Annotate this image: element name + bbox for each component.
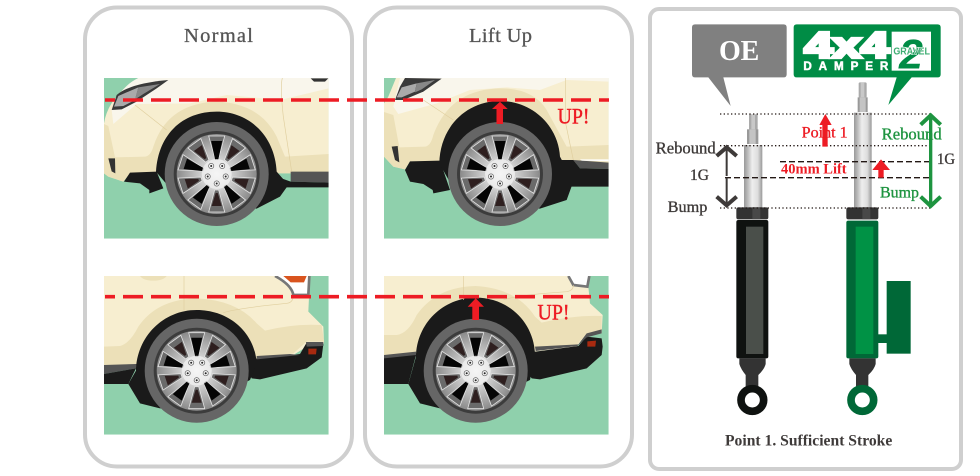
callout: OE	[692, 24, 787, 106]
arrow: 40mm lift	[872, 159, 890, 178]
heading: Normal: Normal	[184, 25, 253, 47]
reference line: upper dashed	[105, 98, 609, 102]
wheel	[424, 319, 528, 423]
label: UP!: UP!	[558, 104, 590, 128]
label: 1G 4x4: 1G	[937, 151, 955, 168]
callout: 4x4 Damper Gravel 2 logo: 2	[898, 30, 923, 77]
callout: 4x4 Damper Gravel 2 logo: DAMPER	[803, 60, 889, 73]
callout: OE: OE	[719, 36, 759, 67]
label: 1G OE: 1G	[690, 167, 709, 184]
panel: normal	[85, 8, 352, 466]
wheel	[145, 319, 249, 423]
arrow: 4x4 travel	[921, 115, 941, 206]
arrow: OE travel	[717, 147, 737, 205]
label: Rebound 4x4: Rebound	[882, 124, 942, 143]
illustration: normal front wheel	[104, 78, 329, 239]
callout: 4x4 Damper Gravel 2 logo: GRAVEL	[893, 46, 930, 57]
label: UP!: UP!	[538, 300, 570, 324]
panel: damper comparison	[650, 9, 961, 469]
wheel	[165, 122, 269, 226]
illustration: normal rear wheel	[104, 276, 329, 435]
panel: lift up	[365, 8, 632, 466]
wheel	[448, 122, 552, 226]
label: Bump OE: Bump	[668, 199, 707, 216]
label: 40mm Lift: 40mm Lift	[781, 161, 847, 177]
4x4 damper	[846, 82, 911, 411]
illustration: lifted front wheel	[384, 78, 609, 239]
arrow: up	[468, 298, 484, 320]
label: Bump 4x4: Bump	[880, 184, 919, 201]
OE damper	[736, 114, 768, 411]
heading: Lift Up: Lift Up	[469, 25, 532, 47]
arrow: Point 1	[819, 114, 832, 147]
arrow: up	[492, 102, 508, 124]
callout: 4x4 Damper Gravel 2 logo	[794, 24, 941, 105]
illustration: lifted rear wheel	[384, 276, 609, 435]
stroke guide lines	[720, 114, 932, 208]
caption: Point 1. Sufficient Stroke	[725, 432, 892, 449]
label: Rebound OE: Rebound	[656, 139, 716, 158]
reference line: lower dashed	[105, 295, 609, 299]
callout: 4x4 Damper Gravel 2 logo: 4x4	[804, 24, 889, 65]
label: Point 1: Point 1	[802, 125, 848, 142]
